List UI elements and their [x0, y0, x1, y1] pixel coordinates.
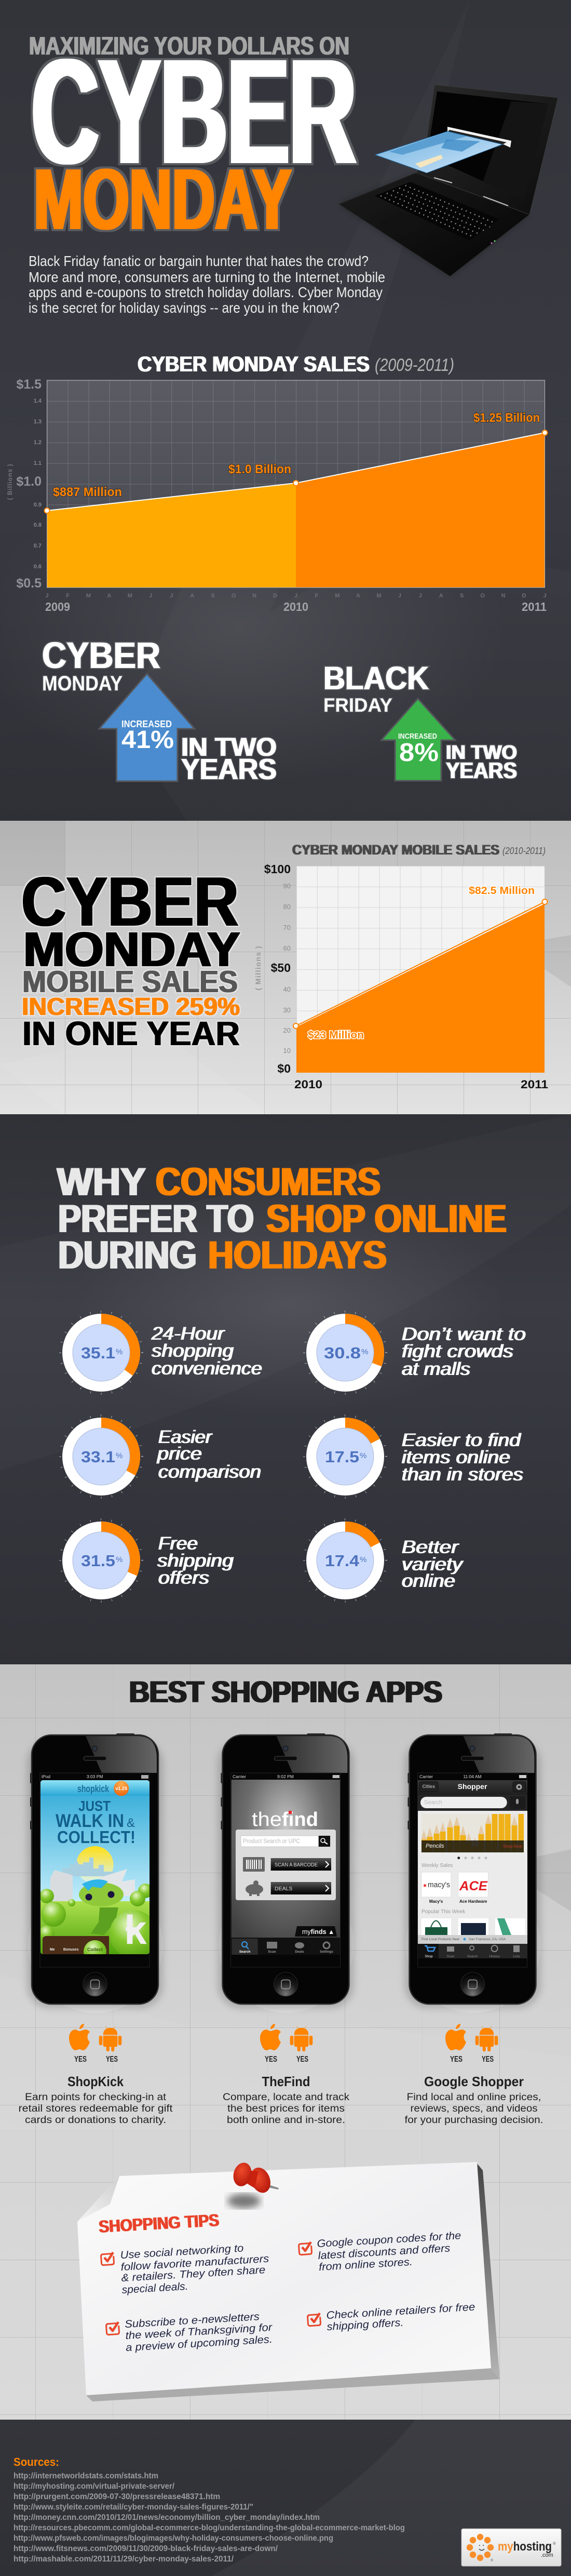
heading: why consumers prefer to shop online during holidays [57, 1160, 507, 1277]
app description: shopkick: retail stores redeemable for gift [19, 2103, 173, 2114]
screen: google shopper: Shop Now [503, 1844, 522, 1849]
donut: 31.5% free shipping offers: Free [158, 1533, 198, 1554]
phone: google shopper app: 11:04 AM [463, 1774, 482, 1779]
tip: social networking: special deals. [121, 2280, 188, 2296]
donut: 17.4% better variety online: Better [402, 1537, 459, 1557]
app description: google shopper: reviews, specs, and videos [410, 2103, 538, 2114]
icon: green up arrow [381, 699, 455, 781]
title: monday: MONDAY [34, 151, 292, 248]
app description: shopkick: ShopKick [67, 2074, 124, 2089]
stat: cyber monday increased 41%: INCREASED [121, 719, 172, 729]
screen: shopkick [40, 1780, 149, 1954]
donut: 17.5% easier to find items online than in stores: 17.5 [325, 1448, 359, 1466]
stat: black friday increased 8%: IN TWO [446, 742, 517, 764]
area chart: cyber monday sales 2009 to 2011: ( Billions ) [6, 464, 13, 500]
area chart: cyber monday sales 2009 to 2011: 1.3 [34, 419, 42, 425]
banner: pencils [421, 1814, 524, 1852]
donut: 30.8% don't want to fight crowds at malls: % [361, 1347, 368, 1356]
stat: black friday increased 8%: FRIDAY [323, 695, 392, 716]
stat headline: mobile sales increased 259%: INCREASED 259% [22, 993, 240, 1021]
background swoosh [125, 0, 571, 821]
area chart: cyber monday sales 2009 to 2011: 1.2 [34, 439, 42, 446]
background glow [0, 473, 509, 784]
phone: thefind app: 9:02 PM [277, 1774, 294, 1779]
screen: google shopper: Find Local Products Near [422, 1938, 460, 1941]
donut: 33.1% easier price comparison: comparison [158, 1462, 261, 1482]
screen: thefind: myfinds ▲ [302, 1928, 334, 1936]
area chart: cyber monday sales 2009 to 2011: 0.9 [34, 502, 42, 508]
logo: myhosting: ® [491, 2558, 494, 2562]
donut: 33.1% easier price comparison [60, 1416, 261, 1498]
tip: e-newsletters: the week of Thanksgiving for [125, 2321, 273, 2342]
app description: shopkick [19, 2074, 173, 2126]
area chart: mobile sales 2010 to 2011: 20 [283, 1026, 291, 1034]
heading: why consumers prefer to shop online during holidays: DURING [58, 1233, 197, 1277]
tip: coupon codes: from online stores. [318, 2256, 413, 2273]
stat: cyber monday increased 41%: IN TWO [181, 732, 277, 762]
note heading: SHOPPING TIPS [98, 2210, 220, 2236]
donut: 30.8% don't want to fight crowds at malls: 30.8 [324, 1344, 361, 1362]
screen: shopkick: JUST [78, 1798, 111, 1814]
app description: google shopper: for your purchasing decision. [405, 2115, 543, 2126]
heading: why consumers prefer to shop online during holidays: PREFER TO [58, 1197, 254, 1241]
screen: google shopper: Popular This Week [422, 1909, 466, 1915]
area chart: mobile sales 2010 to 2011 [254, 862, 548, 1091]
sources list: http://internetworldstats.com/stats.htm [13, 2472, 158, 2480]
tip: free shipping: Check online retailers for free [326, 2301, 475, 2321]
kicker text: MAXIMIZING YOUR DOLLARS ON [29, 32, 349, 60]
tip: e-newsletters: Subscribe to e-newsletters [125, 2311, 260, 2330]
screen: shopkick: Bonuses [63, 1948, 79, 1952]
app description: thefind: both online and in-store. [227, 2115, 345, 2126]
intro paragraph: More and more, consumers are turning to the Internet, mobile [29, 269, 385, 285]
screen: google shopper: Weekly Sales [422, 1863, 453, 1868]
icon: blue up arrow [99, 674, 195, 781]
donut: 35.1% 24-hour shopping convenience: convenience [152, 1358, 262, 1379]
stat headline: mobile sales increased 259%: CYBER [21, 862, 239, 941]
intro paragraph: is the secret for holiday savings -- are you in the know? [29, 300, 339, 316]
screen: shopkick: & [127, 1816, 135, 1830]
donut: 33.1% easier price comparison: % [116, 1451, 123, 1460]
screen: thefind: SCAN A BARCODE [275, 1862, 318, 1868]
phone: thefind app: Carrier [233, 1774, 246, 1779]
area chart: mobile sales 2010 to 2011: $50 [271, 961, 291, 975]
icon: push pin [227, 2160, 279, 2208]
title: cyber: CYBER [32, 28, 356, 195]
app platform icons: shopkick: YES [74, 2055, 87, 2064]
app description: google shopper: Find local and online prices, [407, 2092, 541, 2103]
app description: thefind [223, 2074, 350, 2126]
screen: shopkick: WALK IN [56, 1811, 124, 1831]
screen: thefind: Deals [295, 1950, 304, 1954]
stat: black friday increased 8%: YEARS [446, 758, 517, 783]
area chart: mobile sales 2010 to 2011: 2011 [521, 1078, 548, 1091]
donut: 17.4% better variety online: variety [402, 1554, 464, 1574]
tip: coupon codes: Google coupon codes for the [317, 2230, 461, 2250]
app platform icons: shopkick: YES [106, 2055, 118, 2064]
screen: google shopper: San Francisco, CA, USA [469, 1938, 506, 1941]
area chart: cyber monday sales 2009 to 2011: $1.0 Billion [228, 462, 291, 476]
tip: free shipping: shipping offers. [327, 2317, 404, 2333]
screen: shopkick: k [124, 1907, 147, 1953]
section background: dark header and sales [0, 0, 571, 821]
tip: coupon codes [298, 2230, 461, 2273]
area chart: mobile sales 2010 to 2011: 80 [283, 903, 291, 911]
logo: myhosting: myhosting [498, 2540, 552, 2554]
area chart: cyber monday sales 2009 to 2011: 1.1 [34, 460, 42, 466]
area chart: cyber monday sales 2009 to 2011: 2010 [283, 600, 308, 613]
area chart: cyber monday sales 2009 to 2011: $1.0 [16, 474, 42, 489]
donut: 35.1% 24-hour shopping convenience: 35.1 [81, 1344, 115, 1362]
donut: 35.1% 24-hour shopping convenience [60, 1312, 262, 1394]
stat: cyber monday increased 41% [42, 635, 277, 786]
tip: free shipping [307, 2301, 475, 2333]
stat: cyber monday increased 41%: 41% [121, 726, 174, 754]
logo: myhosting: ® [553, 2541, 556, 2546]
stat headline: mobile sales increased 259%: IN ONE YEAR [22, 1014, 240, 1052]
app platform icons: google shopper [445, 2024, 498, 2064]
app platform icons: thefind: YES [265, 2055, 277, 2064]
area chart: cyber monday sales 2009 to 2011: 2011 [522, 600, 547, 613]
tip: e-newsletters: a preview of upcoming sales. [126, 2333, 273, 2354]
stat headline: mobile sales increased 259% [21, 862, 240, 1052]
tip: e-newsletters [106, 2311, 273, 2354]
app description: thefind: the best prices for items [227, 2103, 345, 2114]
area chart: mobile sales 2010 to 2011: $100 [264, 862, 291, 876]
area chart: mobile sales 2010 to 2011: 2010 [294, 1078, 322, 1091]
area chart: cyber monday sales 2009 to 2011: 0.8 [34, 522, 42, 528]
sources list: http://myhosting.com/virtual-private-server/ [13, 2482, 175, 2491]
donut: 17.4% better variety online: online [402, 1571, 455, 1591]
area chart: cyber monday sales 2009 to 2011: $1.5 [16, 377, 42, 392]
background swoosh [0, 1114, 571, 1470]
app description: shopkick: cards or donations to charity. [25, 2115, 166, 2126]
donut: 17.5% easier to find items online than in stores: than in stores [402, 1464, 523, 1485]
sources list: http://www.fitsnews.com/2009/11/30/2009-black-friday-sales-are-down/ [13, 2544, 278, 2553]
area chart: cyber monday sales 2009 to 2011: 2009 [45, 600, 70, 613]
chart heading: mobile sales: CYBER MONDAY MOBILE SALES [292, 842, 499, 858]
area chart: cyber monday sales 2009 to 2011: $1.25 Billion [473, 411, 540, 425]
area chart: mobile sales 2010 to 2011: $0 [277, 1062, 291, 1075]
app description: shopkick: Earn points for checking-in at [25, 2092, 167, 2103]
sources list: http://money.cnn.com/2010/12/01/news/economy/billion_cyber_monday/index.htm [13, 2513, 320, 2522]
panel: best shopping apps and tips [0, 1664, 571, 2420]
area chart: mobile sales 2010 to 2011: 10 [283, 1047, 291, 1055]
app platform icons: thefind: YES [296, 2055, 308, 2064]
area chart: mobile sales 2010 to 2011: 40 [283, 985, 291, 993]
phone: shopkick app: iPod [42, 1774, 50, 1779]
donut: 31.5% free shipping offers [60, 1519, 234, 1601]
screen: thefind: Search [239, 1950, 251, 1954]
app description: thefind: TheFind [262, 2074, 310, 2089]
donut: 31.5% free shipping offers: shipping [157, 1551, 234, 1571]
sources list: http://www.pfsweb.com/images/blogimages/why-holiday-consumers-choose-online.png [13, 2534, 333, 2543]
stat: black friday increased 8% [323, 660, 517, 783]
donut: 30.8% don't want to fight crowds at malls: at malls [402, 1359, 470, 1379]
chart heading: cyber monday sales: (2009-2011) [375, 355, 454, 375]
area chart: mobile sales 2010 to 2011: 90 [283, 882, 291, 890]
donut: 35.1% 24-hour shopping convenience: shopping [152, 1341, 234, 1361]
screen: google shopper: Scan [447, 1955, 455, 1958]
app description: google shopper [405, 2074, 543, 2126]
donut: 30.8% don't want to fight crowds at malls [304, 1312, 526, 1394]
donut: 33.1% easier price comparison: Easier [158, 1427, 212, 1447]
heading: why consumers prefer to shop online during holidays: WHY [57, 1160, 146, 1204]
screen: google shopper: Shopper [458, 1782, 487, 1791]
screen: google shopper: macy's [428, 1880, 450, 1889]
intro paragraph: Black Friday fanatic or bargain hunter that hates the crowd? [29, 253, 369, 269]
logo: myhosting [461, 2529, 561, 2566]
chart heading: cyber monday sales: CYBER MONDAY SALES [138, 352, 370, 376]
tip: social networking: follow favorite manufacturers [120, 2253, 269, 2273]
area chart: cyber monday sales 2009 to 2011: 0.6 [34, 564, 42, 570]
stat: cyber monday increased 41%: YEARS [181, 753, 277, 786]
heading: best shopping apps: BEST SHOPPING APPS [129, 1675, 442, 1709]
donut: 31.5% free shipping offers: % [116, 1555, 123, 1564]
section background: why consumers [0, 1114, 571, 1664]
screen: google shopper: Pencils [426, 1843, 444, 1849]
area chart: cyber monday sales 2009 to 2011: $887 Million [53, 485, 122, 499]
donut: 17.5% easier to find items online than in stores: items online [402, 1447, 510, 1467]
phone: shopkick app: 3:03 PM [87, 1774, 103, 1779]
area chart: cyber monday sales 2009 to 2011: 0.7 [34, 543, 42, 549]
area chart: mobile sales 2010 to 2011: 30 [283, 1006, 291, 1014]
intro paragraph: apps and e-coupons to stretch holiday dollars. Cyber Monday [29, 284, 383, 300]
screen: google shopper: ★ [423, 1883, 427, 1889]
sources list: http://prurgent.com/2009-07-30/pressrelease48371.htm [13, 2492, 220, 2501]
app platform icons: shopkick [69, 2024, 121, 2064]
heading: why consumers prefer to shop online during holidays: CONSUMERS [156, 1160, 380, 1204]
donut: 35.1% 24-hour shopping convenience: % [116, 1347, 123, 1356]
screen: google shopper: Search [424, 1799, 442, 1806]
app platform icons: thefind [260, 2024, 312, 2064]
stat: cyber monday increased 41%: CYBER [42, 635, 160, 676]
screen: google shopper: Macy's [429, 1899, 443, 1904]
app platform icons: google shopper: YES [482, 2055, 494, 2064]
tip: social networking [101, 2242, 269, 2296]
app description: google shopper: Google Shopper [424, 2074, 524, 2089]
title block [29, 28, 356, 248]
donut: 17.4% better variety online: 17.4 [325, 1552, 360, 1570]
screen: thefind: DEALS [275, 1886, 292, 1892]
screen: thefind: find [282, 1809, 318, 1831]
tip: social networking: Use social networking to [120, 2242, 244, 2261]
sources list: Sources: [13, 2455, 59, 2468]
note: shopping tips [77, 2160, 500, 2401]
screen: thefind: Settings [320, 1950, 333, 1954]
section background: footer [0, 2420, 571, 2576]
donut: 30.8% don't want to fight crowds at malls: Don’t want to [402, 1324, 526, 1344]
chart heading: mobile sales: (2010-2011) [502, 846, 546, 856]
heading: why consumers prefer to shop online during holidays: SHOP ONLINE [266, 1197, 507, 1241]
screen: thefind [232, 1780, 340, 1955]
area chart: cyber monday sales 2009 to 2011 [6, 377, 547, 613]
screen: google shopper: History [489, 1955, 500, 1958]
logo: myhosting: .com [541, 2552, 553, 2558]
donut: 17.5% easier to find items online than in stores [304, 1416, 523, 1498]
screen: google shopper: Cities [422, 1784, 435, 1789]
donut: 33.1% easier price comparison: price [157, 1444, 202, 1464]
area chart: mobile sales 2010 to 2011: 60 [283, 944, 291, 952]
screen: shopkick: shopkick [77, 1784, 109, 1795]
donut: 17.5% easier to find items online than in stores: % [360, 1451, 366, 1460]
screen: shopkick: Me [50, 1948, 55, 1952]
area chart: mobile sales 2010 to 2011: 70 [283, 924, 291, 931]
screen: google shopper: ACE [459, 1879, 488, 1893]
phone: google shopper app: Carrier [419, 1774, 433, 1779]
screen: google shopper: Ace Hardware [459, 1899, 487, 1904]
stat: black friday increased 8%: INCREASED [398, 732, 437, 741]
area chart: cyber monday sales 2009 to 2011: JFMAMJJASONDJFMAMJJASONDJ [45, 593, 547, 599]
background swoosh [211, 2420, 571, 2576]
sources list: http://resources.pbecomm.com/global-ecommerce-blog/understanding-the-global-ecommerce-market-blog [13, 2524, 405, 2532]
stat: black friday increased 8%: 8% [399, 739, 439, 767]
screen: thefind: the [252, 1809, 282, 1831]
stat headline: mobile sales increased 259%: MONDAY [23, 922, 240, 977]
donut: 31.5% free shipping offers: 31.5 [81, 1552, 115, 1570]
donut: 33.1% easier price comparison: 33.1 [81, 1448, 115, 1466]
screen: google shopper: Lists [513, 1955, 520, 1958]
tip: coupon codes: latest discounts and offers [318, 2242, 451, 2262]
tip: social networking: & retailers. They often share [121, 2264, 266, 2284]
background glow [73, 1190, 509, 1418]
app platform icons: google shopper: YES [450, 2055, 463, 2064]
area chart: mobile sales 2010 to 2011: $23 Million [308, 1030, 364, 1041]
phone: thefind app [218, 1733, 354, 2013]
screen: shopkick: COLLECT! [57, 1827, 135, 1847]
screen: shopkick: Collect [87, 1947, 103, 1952]
sources list: http://www.styleite.com/retail/cyber-monday-sales-figures-2011/" [13, 2503, 253, 2512]
phone: shopkick app [27, 1733, 163, 2013]
sources list [13, 2455, 405, 2564]
panel: mobile sales [0, 821, 571, 1114]
heading: why consumers prefer to shop online during holidays: HOLIDAYS [208, 1233, 387, 1277]
screen: google shopper [418, 1780, 527, 1958]
screen: thefind: Scan [268, 1950, 276, 1954]
stat: cyber monday increased 41%: MONDAY [42, 672, 123, 695]
donut: 31.5% free shipping offers: offers [158, 1568, 209, 1588]
donut: 17.4% better variety online: % [360, 1555, 366, 1564]
screen: google shopper: Shop [425, 1955, 433, 1958]
area chart: cyber monday sales 2009 to 2011: 1.4 [34, 398, 42, 404]
donut: 35.1% 24-hour shopping convenience: 24-Hour [151, 1324, 225, 1344]
screen: thefind: Product Search or UPC [243, 1838, 300, 1845]
intro paragraph [29, 253, 385, 316]
donut: 17.4% better variety online [304, 1519, 464, 1601]
area chart: mobile sales 2010 to 2011: ( Millions ) [254, 946, 262, 990]
laptop with credit card illustration [339, 85, 558, 276]
phone: google shopper app [405, 1733, 541, 2013]
donut: 17.5% easier to find items online than in stores: Easier to find [402, 1430, 522, 1450]
sources list: http://mashable.com/2011/11/29/cyber-monday-sales-2011/ [13, 2555, 234, 2564]
screen: google shopper: Search [467, 1955, 478, 1958]
app description: thefind: Compare, locate and track [223, 2092, 350, 2103]
area chart: cyber monday sales 2009 to 2011: $0.5 [16, 576, 42, 591]
stat headline: mobile sales increased 259%: MOBILE SALES [22, 965, 238, 999]
screen: shopkick: v1.25 [115, 1786, 127, 1791]
donut: 30.8% don't want to fight crowds at malls: fight crowds [402, 1341, 513, 1362]
area chart: mobile sales 2010 to 2011: $82.5 Million [469, 885, 535, 897]
stat: black friday increased 8%: BLACK [323, 660, 429, 697]
